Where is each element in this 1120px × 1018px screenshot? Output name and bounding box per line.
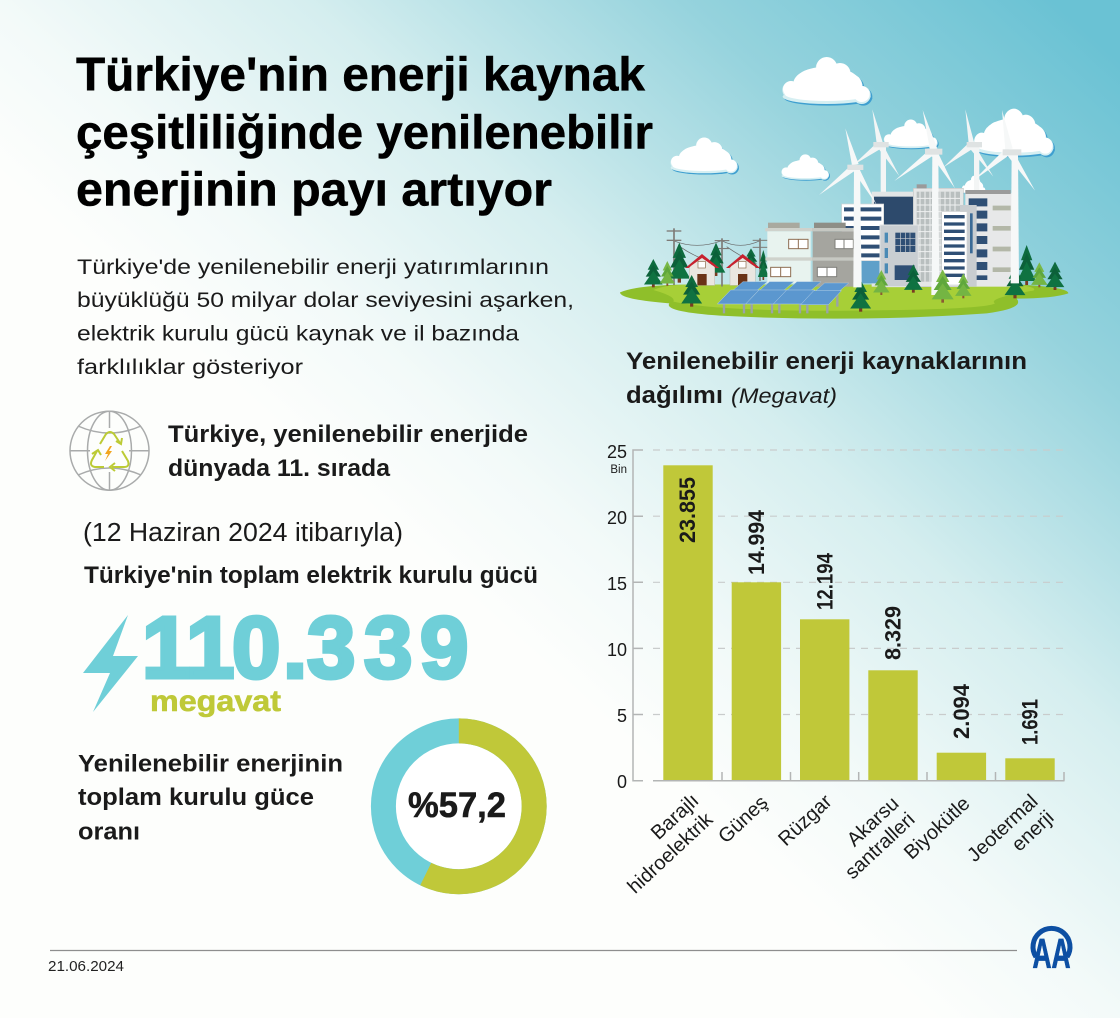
wind turbines rear	[853, 109, 993, 193]
axes	[633, 450, 1064, 781]
y axis labels: 10	[607, 640, 627, 660]
background trees	[668, 243, 1036, 285]
chart heading: (Megavat)	[731, 385, 837, 408]
y axis labels: Bin	[610, 464, 627, 476]
ground	[620, 285, 1068, 319]
bar values: 8.329	[880, 606, 906, 660]
category labels: santralleri	[841, 809, 919, 884]
donut chart: 57,2%	[383, 731, 534, 882]
date note: (12 Haziran 2024 itibarıyla)	[83, 519, 403, 547]
cloud: right	[974, 109, 1055, 157]
bar values: 2.094	[949, 683, 974, 739]
bars	[663, 465, 1055, 781]
icon: lightning bolt	[83, 615, 138, 712]
trees	[644, 259, 1064, 312]
category labels: Rüzgar	[774, 790, 837, 851]
cloud: behind turbines	[884, 120, 939, 149]
chart heading: Yenilenebilir enerji kaynaklarının	[626, 348, 1027, 375]
cloud: top	[782, 57, 872, 106]
cloud: small centre	[781, 154, 830, 181]
title: enerjinin payı artıyor	[76, 162, 552, 216]
icon: globe with recycling symbol	[70, 411, 149, 490]
heading: total installed capacity: Türkiye'nin toplam elektrik kurulu gücü	[84, 562, 538, 589]
illustration: renewable energy city	[620, 57, 1068, 319]
title	[76, 48, 653, 216]
share label: Yenilenebilir enerjinin	[78, 750, 343, 778]
building: right tower	[965, 190, 1012, 287]
date: 21.06.2024	[48, 959, 124, 975]
callout: world ranking: dünyada 11. sırada	[168, 455, 391, 482]
footer rule	[50, 950, 1017, 952]
intro text block: büyüklüğü 50 milyar dolar seviyesini aşarken,	[77, 288, 574, 312]
donut value: %57,2	[408, 786, 506, 825]
callout: world ranking: Türkiye, yenilenebilir enerjide	[168, 421, 528, 448]
intro text block	[77, 255, 574, 379]
share label	[78, 750, 343, 846]
y axis labels	[607, 442, 627, 792]
y axis labels: 20	[607, 508, 627, 528]
houses	[685, 254, 760, 285]
power poles	[667, 228, 767, 286]
category labels: hidroelektrik	[624, 808, 718, 898]
share label: toplam kurulu güce	[78, 784, 314, 811]
category labels	[624, 790, 1058, 898]
y axis labels: 15	[607, 574, 627, 594]
category labels: Jeotermal	[963, 791, 1042, 867]
category labels: Biyokütle	[900, 793, 974, 864]
y axis labels: 5	[617, 706, 627, 726]
title: çeşitliliğinde yenilenebilir	[76, 106, 653, 158]
chart heading	[626, 348, 1027, 409]
bar values: 14.994	[744, 509, 769, 575]
building: grey apartment	[812, 223, 855, 287]
unit: megavat: megavat	[150, 685, 281, 718]
wind turbines front	[819, 110, 1035, 295]
big number: 110.339	[142, 600, 468, 696]
intro text block: elektrik kurulu gücü kaynak ve il bazında	[77, 322, 519, 346]
y axis labels: 25	[607, 442, 627, 462]
category labels: Akarsu	[843, 793, 903, 851]
bar values: 12.194	[812, 552, 838, 610]
intro text block: farklılıklar gösteriyor	[77, 355, 303, 379]
building: mid grey block	[880, 225, 918, 287]
category labels: Barajlı	[647, 790, 703, 844]
bar values	[675, 477, 1042, 745]
title: Türkiye'nin enerji kaynak	[76, 48, 646, 100]
front light trees	[932, 269, 954, 303]
cloud: left	[671, 138, 739, 175]
building: white striped tower	[842, 204, 884, 261]
category labels: enerji	[1008, 807, 1058, 856]
callout: world ranking	[168, 421, 528, 482]
bar chart: renewable sources	[607, 442, 1065, 898]
solar panels	[717, 282, 849, 313]
bar values: 1.691	[1018, 699, 1042, 745]
bar values: 23.855	[675, 477, 700, 543]
intro text block: Türkiye'de yenilenebilir enerji yatırımlarının	[77, 255, 549, 279]
building: grey side tower with stripes	[942, 205, 977, 287]
cloud: behind buildings	[962, 176, 986, 195]
y axis labels: 0	[617, 772, 627, 792]
building: glass tower	[862, 192, 913, 287]
logo: Anadolu Agency	[1032, 928, 1070, 977]
chart heading: dağılımı	[626, 382, 723, 409]
logo: Anadolu Agency: AA	[1032, 930, 1070, 977]
share label: oranı	[78, 818, 140, 846]
building: grey grid tower	[913, 184, 963, 287]
building: light apartment	[765, 223, 812, 283]
category labels: Güneş	[714, 792, 772, 848]
